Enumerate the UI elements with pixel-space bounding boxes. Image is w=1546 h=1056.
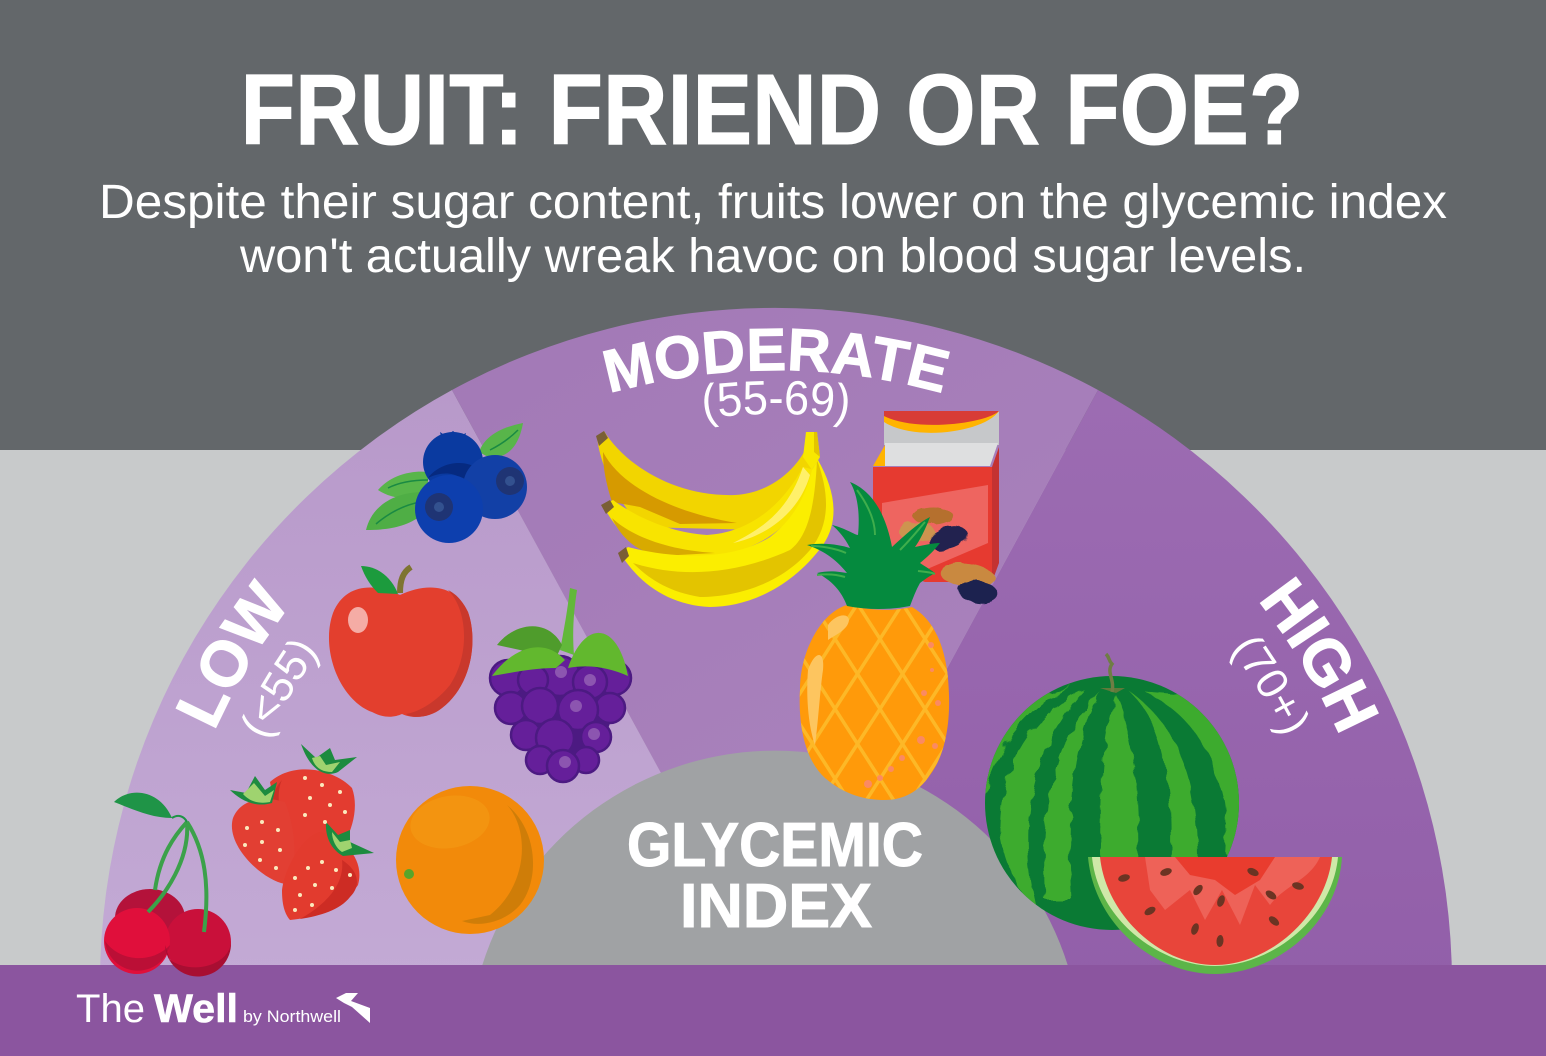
logo: The Well by Northwell: Well xyxy=(154,987,238,1031)
label: moderate range: (55-69) xyxy=(704,380,848,428)
icon: watermelon whole xyxy=(975,654,1245,930)
icon: orange xyxy=(396,786,544,934)
logo: The Well by Northwell xyxy=(76,987,370,1031)
hub label xyxy=(627,811,923,941)
icon: bananas xyxy=(596,431,834,607)
icon: apple xyxy=(329,566,472,717)
label: low range: (<55) xyxy=(242,642,320,737)
logo: The Well by Northwell: by Northwell xyxy=(243,1007,341,1026)
hub label: INDEX xyxy=(680,872,872,941)
label: low: LOW xyxy=(176,578,284,728)
glycemic index gauge xyxy=(100,308,1452,984)
icon: strawberries xyxy=(230,744,374,920)
icon: pineapple xyxy=(800,482,950,800)
subtitle: won't actually wreak havoc on blood sugar levels. xyxy=(239,230,1306,283)
logo: The Well by Northwell: The xyxy=(76,987,145,1031)
icon: box of raisins xyxy=(873,411,999,606)
subtitle: Despite their sugar content, fruits lower on the glycemic index xyxy=(99,176,1447,229)
label: moderate: MODERATE xyxy=(602,328,950,393)
background: top grey band xyxy=(0,0,1546,450)
icon: watermelon slice xyxy=(1088,857,1342,974)
label: high range: (70+) xyxy=(1230,638,1308,734)
segment: low xyxy=(100,390,776,984)
segment: moderate xyxy=(452,308,1098,984)
icon: bird mark xyxy=(336,993,370,1023)
icon: blueberries xyxy=(366,423,527,543)
background: light grey band xyxy=(0,450,1546,966)
title: FRUIT: FRIEND OR FOE? xyxy=(240,54,1304,166)
gauge hub xyxy=(482,751,1068,966)
icon: cherries xyxy=(104,793,231,977)
label: high: HIGH xyxy=(1260,576,1379,733)
subtitle xyxy=(99,176,1447,283)
segment: high xyxy=(776,390,1452,984)
icon: blackberry xyxy=(490,588,631,782)
hub label: GLYCEMIC xyxy=(627,811,923,880)
footer bar xyxy=(0,965,1546,1056)
